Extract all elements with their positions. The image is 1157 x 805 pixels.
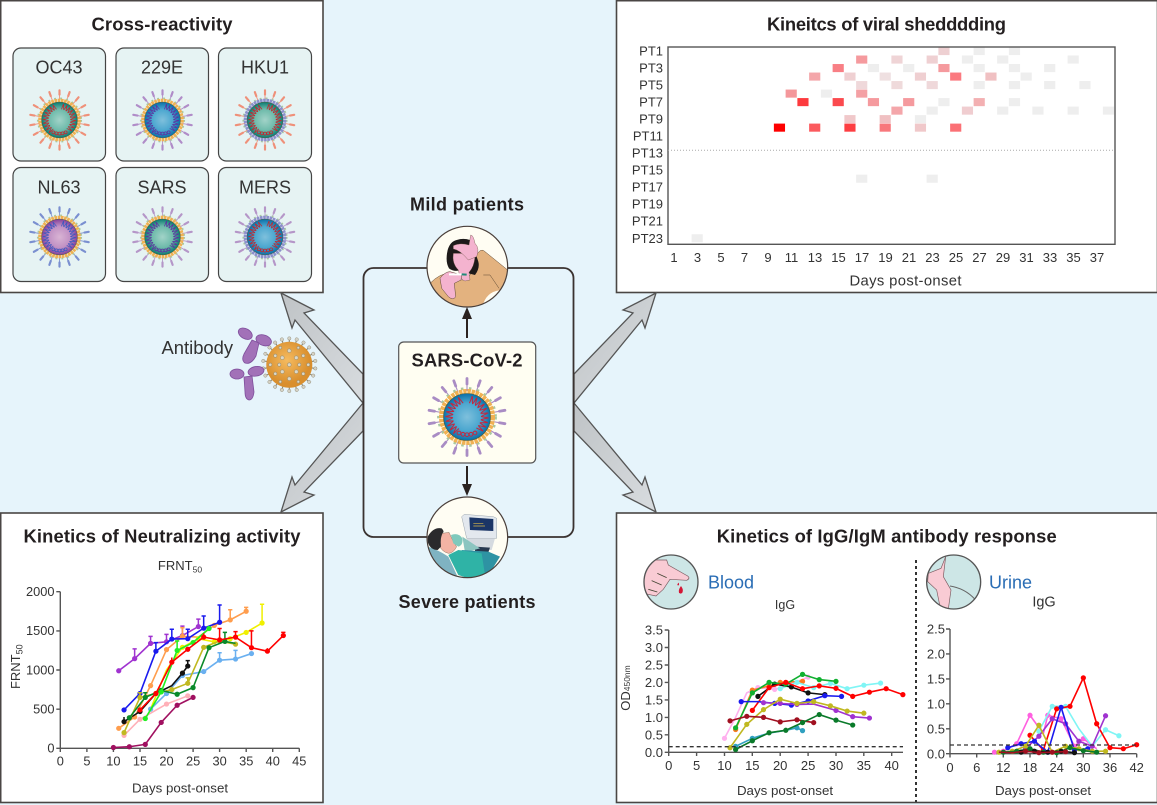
urine axes: 2.0 [927, 646, 945, 662]
circle: mild patient [425, 226, 508, 312]
arrow: up to mild [462, 307, 472, 338]
urine x label: Days post-onset [995, 783, 1091, 798]
blood axes: 2.0 [645, 675, 663, 690]
neutralizing axes: 2000 [26, 584, 54, 599]
arrow: to cross-reactivity [281, 293, 363, 403]
urine axes: 6 [973, 760, 980, 775]
heading: neutralizing: Kinetics of Neutralizing activity [24, 526, 301, 547]
heatmap row labels: PT11 [633, 129, 663, 144]
urine axes: 0.5 [927, 721, 945, 736]
x axis label: Days post-onset [132, 781, 228, 796]
panel: neutralizing activity [1, 513, 323, 802]
urine axes: 1.5 [927, 672, 945, 686]
heading: viral shedding: Kineitcs of viral shedddding [767, 14, 1006, 34]
blood axes: 2.5 [645, 658, 663, 673]
heatmap day labels: 3 [694, 250, 701, 265]
heatmap day labels: 17 [855, 250, 869, 265]
urine axes [927, 622, 1144, 775]
heatmap row labels [632, 44, 663, 246]
neutralizing axes: 1000 [26, 662, 54, 677]
neutralizing axes: 500 [33, 702, 54, 716]
label: urine: Urine [989, 573, 1032, 593]
circle: severe patient [427, 497, 508, 578]
card: NL63: NL63 [37, 178, 81, 198]
blood axes: 10 [717, 758, 732, 773]
urine axes: 2.5 [927, 622, 945, 637]
heatmap day labels: 25 [949, 250, 963, 265]
heatmap day labels: 33 [1043, 250, 1057, 265]
blood axes: 35 [857, 758, 871, 773]
arrow: to IgG/IgM [574, 403, 656, 512]
urine axes: 42 [1129, 760, 1144, 775]
card: 229E [116, 48, 208, 161]
card: OC43 [13, 48, 106, 161]
blood axes: 20 [773, 758, 787, 773]
label: blood: Blood [708, 573, 754, 593]
neutralizing axes: 0 [47, 741, 54, 756]
neutralizing axes [26, 584, 306, 768]
neutralizing axes: 45 [292, 754, 306, 768]
blood cutoff line [669, 746, 903, 748]
neutralizing axes: 10 [106, 754, 121, 768]
blood x label: Days post-onset [737, 783, 833, 798]
neutralizing series [113, 604, 285, 748]
heatmap row labels: PT19 [632, 197, 663, 212]
card: NL63 [13, 168, 106, 282]
y axis label: FRNT [8, 654, 23, 689]
heatmap day labels: 11 [785, 250, 798, 265]
urine axes: 0.0 [927, 746, 945, 761]
blood axes: 3.0 [645, 640, 663, 655]
arrow: down to severe [462, 466, 472, 496]
card: SARS [116, 168, 208, 282]
heatmap row labels: PT17 [632, 180, 663, 195]
y axis label: 50 [14, 644, 24, 654]
blood axes: 1.0 [645, 710, 663, 725]
urine axes: 1.0 [927, 696, 945, 711]
box: SARS-CoV-2 [399, 342, 536, 463]
heatmap row labels: PT23 [632, 231, 663, 246]
blood axes [645, 623, 903, 773]
chart subtitle: FRNT [158, 558, 193, 573]
icon: urine [927, 555, 981, 609]
heatmap day labels: 13 [808, 250, 822, 265]
neutralizing axes: 25 [186, 754, 200, 768]
chart subtitle: 50 [193, 564, 202, 574]
card: 229E: 229E [141, 58, 183, 78]
heading: IgG/IgM: Kinetics of IgG/IgM antibody response [717, 526, 1057, 547]
central frame [364, 268, 574, 537]
heatmap day labels: 1 [670, 250, 678, 265]
heatmap day labels: 37 [1090, 250, 1104, 265]
heatmap day labels: 35 [1066, 250, 1081, 265]
blood axes: 30 [829, 758, 843, 773]
blood axes: 0.0 [645, 745, 663, 760]
label: antibody: Antibody [162, 337, 234, 358]
neutralizing axes: 15 [133, 754, 147, 768]
urine axes: 18 [1023, 760, 1037, 775]
card: MERS [218, 168, 312, 282]
panel: viral shedding [616, 1, 1157, 292]
blood axes: 0.5 [645, 727, 663, 742]
panel: cross-reactivity [1, 1, 323, 292]
heatmap row labels: PT7 [639, 95, 663, 110]
arrow: to shedding [574, 293, 656, 403]
panel: IgG/IgM response [616, 513, 1157, 802]
heatmap day labels: 5 [717, 250, 725, 265]
heatmap day labels: 29 [996, 250, 1010, 265]
card: MERS: MERS [239, 178, 291, 198]
heatmap day labels: 21 [902, 250, 916, 265]
heatmap day labels: 7 [741, 250, 748, 265]
heatmap row labels: PT5 [639, 78, 663, 93]
heatmap day labels: 23 [925, 250, 940, 265]
heatmap row labels: PT21 [632, 214, 663, 229]
label: IgG blood: IgG [775, 598, 795, 612]
blood axes: 1.5 [645, 692, 663, 708]
heatmap day labels [670, 250, 1104, 265]
card: HKU1 [218, 48, 312, 161]
urine axes: 30 [1076, 760, 1091, 775]
arrow: to neutralizing [281, 403, 363, 512]
blood series [724, 674, 903, 750]
heatmap day labels: 15 [831, 250, 846, 265]
neutralizing axes: 0 [57, 754, 64, 768]
y axis label: OD450nm: OD450nm [618, 665, 633, 711]
icon: blood finger [643, 555, 698, 609]
card: OC43: OC43 [35, 58, 83, 78]
blood axes: 0 [665, 758, 672, 773]
urine axes: 12 [996, 760, 1011, 775]
divider between blood and urine [915, 560, 917, 802]
blood axes: 40 [884, 758, 899, 773]
neutralizing axes: 1500 [26, 623, 54, 638]
urine axes: 36 [1103, 760, 1117, 775]
heatmap row labels: PT1 [639, 44, 663, 59]
neutralizing axes: 30 [212, 754, 227, 768]
heading: severe patients: Severe patients [398, 592, 536, 612]
heatmap row labels: PT13 [632, 146, 663, 161]
box: SARS-CoV-2: SARS-CoV-2 [412, 350, 522, 371]
icon: antibody-bound virus [230, 326, 317, 400]
neutralizing axes: 5 [83, 754, 90, 768]
neutralizing axes: 40 [266, 754, 280, 768]
heatmap row labels: PT9 [639, 112, 663, 127]
urine cutoff line [950, 744, 1137, 746]
urine axes: 0 [946, 760, 954, 775]
card: HKU1: HKU1 [241, 58, 289, 78]
heatmap day labels: 9 [764, 250, 772, 265]
heatmap row labels: PT15 [632, 163, 663, 178]
blood axes: 5 [693, 758, 700, 773]
blood axes: 15 [745, 758, 760, 773]
neutralizing axes: 20 [159, 754, 174, 768]
heading: cross-reactivity: Cross-reactivity [92, 14, 233, 34]
label: IgG urine: IgG [1032, 595, 1056, 611]
heatmap day labels: 31 [1019, 250, 1034, 265]
blood axes: 25 [801, 758, 815, 773]
heatmap row labels: PT3 [639, 61, 663, 76]
heatmap day labels: 27 [972, 250, 987, 265]
card: SARS: SARS [137, 178, 187, 198]
urine series [994, 678, 1137, 753]
urine axes: 24 [1049, 760, 1064, 775]
x axis label: Days post-onset [850, 273, 962, 289]
blood axes: 3.5 [645, 623, 663, 638]
heatmap day labels: 19 [878, 250, 893, 265]
heatmap [668, 47, 1115, 244]
heading: mild patients: Mild patients [410, 195, 524, 215]
neutralizing axes: 35 [239, 754, 253, 768]
